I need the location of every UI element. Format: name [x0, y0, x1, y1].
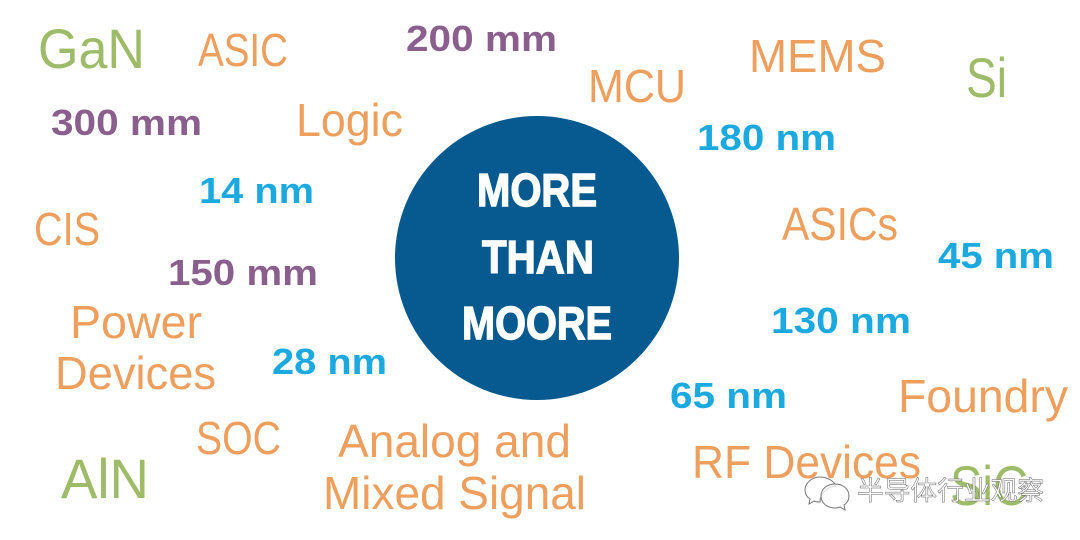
central circle badge: MORE — [477, 164, 597, 216]
node: 45 nm: 45 nm — [938, 235, 1054, 276]
watermark: 半导体行业观察 — [857, 476, 1044, 506]
material label: Si: Si — [966, 46, 1007, 109]
watermark — [805, 476, 1044, 510]
device label: Logic: Logic — [296, 94, 403, 146]
central circle badge — [395, 116, 679, 400]
node: 65 nm: 65 nm — [670, 375, 787, 416]
device label: Analog and Mixed Signal: Mixed Signal — [323, 467, 586, 519]
device label: Power Devices: Power — [70, 296, 202, 348]
device label: MEMS: MEMS — [749, 30, 886, 82]
wafer size: 150 mm: 150 mm — [168, 252, 318, 293]
wafer size: 300 mm: 300 mm — [51, 102, 202, 143]
node: 180 nm: 180 nm — [697, 117, 836, 158]
device label: Foundry: Foundry — [898, 370, 1068, 422]
central circle badge: THAN — [482, 231, 594, 283]
device label: Power Devices: Devices — [55, 347, 216, 399]
device label: RF Devices: RF Devices — [692, 436, 921, 488]
central circle badge: MOORE — [462, 297, 612, 349]
wafer size: 200 mm: 200 mm — [406, 18, 557, 59]
icon: chat bubbles — [805, 477, 849, 510]
device label: ASIC: ASIC — [198, 24, 288, 76]
device label: CIS: CIS — [34, 203, 100, 255]
device label: Analog and Mixed Signal: Analog and — [338, 415, 571, 467]
node: 28 nm: 28 nm — [272, 341, 387, 382]
material label: GaN: GaN — [38, 17, 145, 80]
device label: Analog and Mixed Signal — [323, 415, 586, 519]
device label: SOC: SOC — [196, 412, 281, 464]
device label: MCU: MCU — [588, 60, 686, 112]
node: 14 nm: 14 nm — [199, 170, 314, 211]
material label: AlN: AlN — [61, 447, 149, 510]
device label: Power Devices — [55, 296, 216, 399]
node: 130 nm: 130 nm — [771, 300, 911, 341]
device label: ASICs: ASICs — [782, 198, 898, 250]
material label: SiC: SiC — [950, 454, 1028, 517]
